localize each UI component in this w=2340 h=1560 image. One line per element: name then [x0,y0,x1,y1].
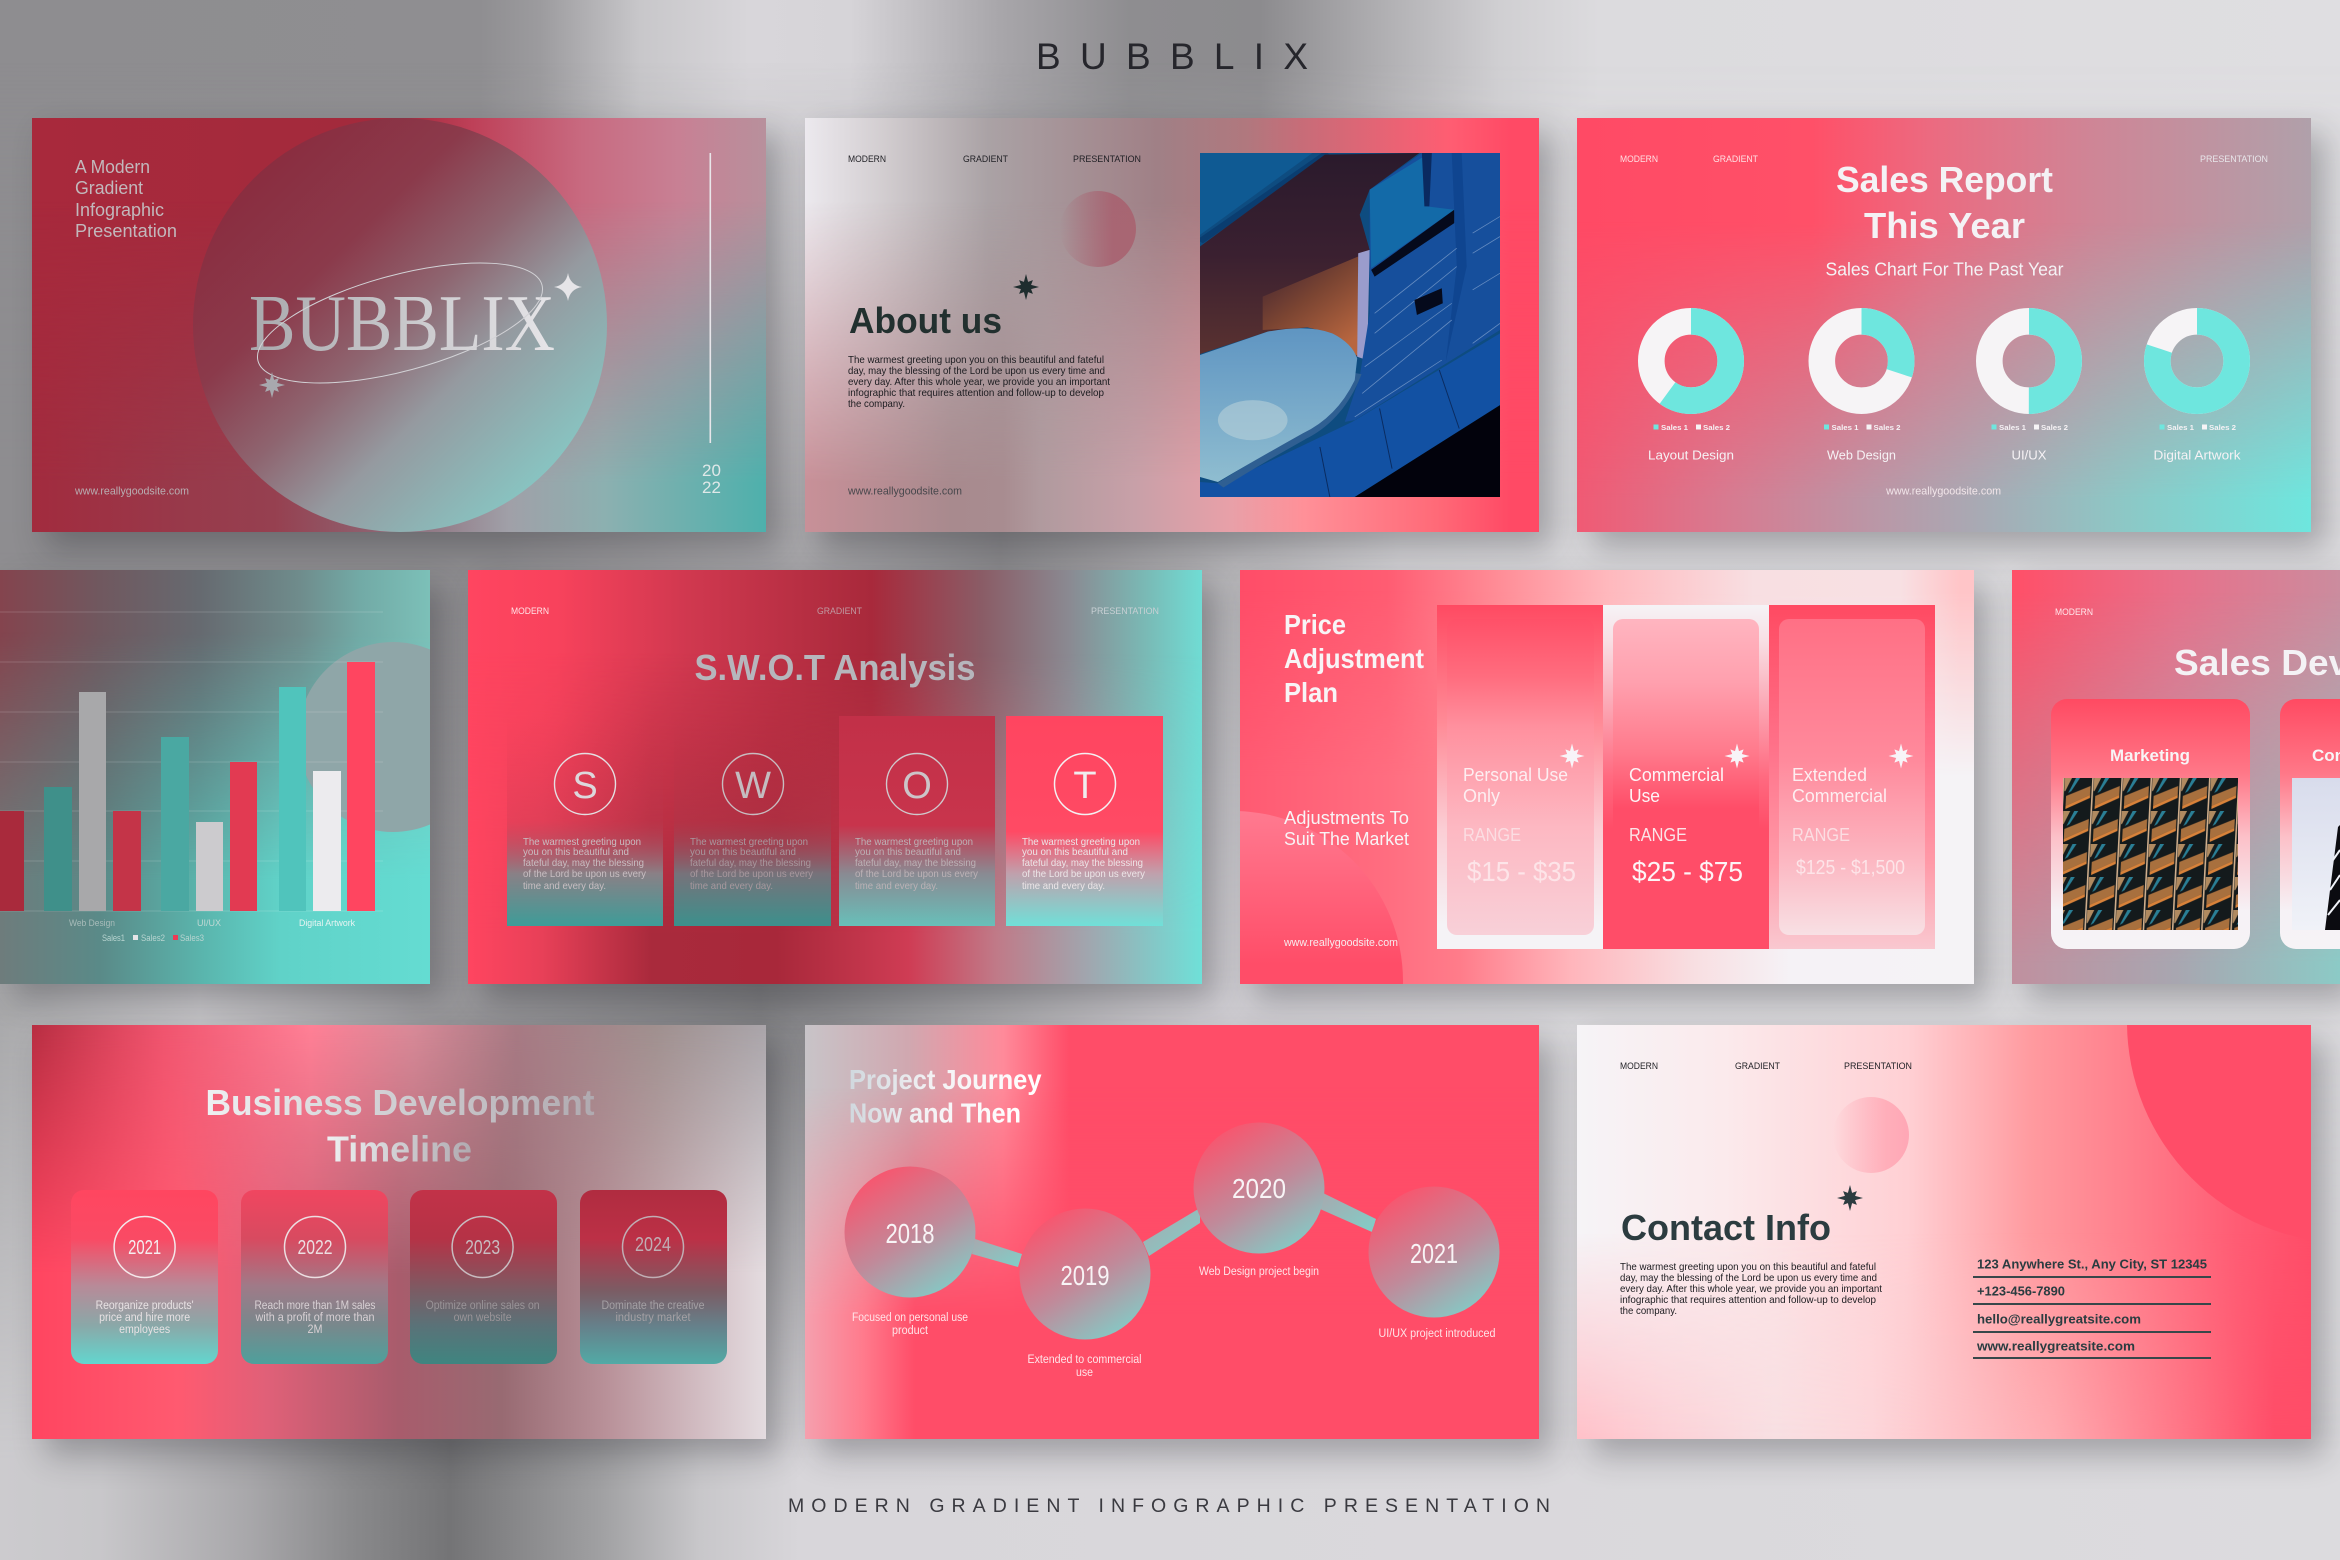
year: 22 [702,478,721,497]
panel: price adjustment plan [1240,570,1974,984]
cover subtitle: Infographic [75,200,164,220]
website: www.reallygoodsite.com [847,486,962,498]
donut labels: Web Design [1827,448,1896,462]
subheading: Adjustments To [1284,808,1409,828]
body text: infographic that requires attention and follow-up to develop [848,388,1104,399]
card: 2022: 2M [308,1322,322,1336]
header labels: PRESENTATION [1073,153,1141,164]
axis labels [69,918,356,928]
panel: bar chart slide [0,570,430,984]
card: 2024: industry market [616,1310,691,1324]
pricing column: personal: RANGE [1463,825,1521,845]
heading: This Year [1864,205,2025,246]
card: 2021: employees [119,1322,170,1336]
donut chart: layout design [1651,321,1731,401]
heading: Plan [1284,677,1338,708]
card: weaknesses: you on this beautiful and [690,847,796,858]
header labels: MODERN [1620,1060,1658,1071]
card: weaknesses: The warmest greeting upon [690,837,808,848]
card: threats [1006,716,1163,926]
swot artwork [507,605,1163,926]
node: 2020: Web Design project begin [1199,1264,1319,1278]
donut legends: Sales 2 [2041,423,2068,432]
heading: Adjustment [1284,643,1424,674]
header labels: MODERN [1620,153,1658,164]
body text [1620,1262,1882,1317]
timeline artwork [71,1082,727,1364]
card: 2021 [71,1190,218,1364]
icon: sparkle [554,273,582,301]
card: threats: time and every day. [1022,881,1105,892]
donut labels [1648,448,2241,462]
card: threats: of the Lord be upon us every [1022,869,1146,880]
decorative blob [1833,1097,1909,1173]
node: 2019: use [1076,1365,1093,1379]
axis labels: Digital Artwork [299,918,356,928]
heading: Now and Then [849,1098,1021,1128]
subheading: Sales Chart For The Past Year [1826,260,2064,280]
node: 2020 [1194,1122,1324,1278]
panel: cover slide [32,118,766,532]
header labels: GRADIENT [817,605,862,616]
donut legends: Sales 2 [2209,423,2236,432]
pricing column: extended: RANGE [1792,825,1850,845]
card: threats: The warmest greeting upon [1022,837,1140,848]
pricing column: commercial: Commercial [1629,765,1724,785]
card: strengths: fateful day, may the blessing [523,858,644,869]
subheading [1284,808,1409,849]
heading [849,1064,1042,1128]
card: opportunities: of the Lord be upon us every [855,869,979,880]
body text: the company. [1620,1306,1677,1317]
card: opportunities: you on this beautiful and [855,847,961,858]
card: weaknesses: time and every day. [690,881,773,892]
donut legends: Sales 2 [1703,423,1730,432]
body text: every day. After this whole year, we provide you an important [848,377,1110,388]
node: 2018: 2018 [886,1218,934,1249]
card: marketing: Marketing [2110,746,2190,765]
bars [0,662,375,911]
card: 2023: Optimize online sales on [426,1298,540,1312]
cover subtitle: Presentation [75,221,177,241]
card: content [2280,699,2340,949]
year [702,461,721,497]
node: 2021: UI/UX project introduced [1378,1326,1496,1340]
node: 2018: Focused on personal use [852,1310,968,1324]
donut labels: UI/UX [2012,448,2047,462]
chart legend: Sales2 [141,933,165,943]
pricing column: commercial: $25 - $75 [1632,856,1743,887]
footer caption: MODERN GRADIENT INFOGRAPHIC PRESENTATION [788,1495,1550,1517]
about artwork [847,153,1500,498]
icon: star [1013,274,1039,300]
subheading: Suit The Market [1284,829,1409,849]
panel: about us [805,118,1539,532]
sales development artwork [2051,606,2340,949]
pricing column: extended [1769,605,1935,949]
cover artwork [74,118,721,532]
body text: day, may the blessing of the Lord be upon us every time and [848,366,1105,377]
header labels: MODERN [511,605,549,616]
website: www.reallygoodsite.com [1885,486,2001,498]
donut legends: Sales 1 [2167,423,2194,432]
pricing column: commercial [1603,605,1769,949]
body text: The warmest greeting upon you on this beautiful and fateful [1620,1262,1876,1273]
header labels: GRADIENT [963,153,1008,164]
pricing column: extended: $125 - $1,500 [1796,857,1905,879]
card: weaknesses: of the Lord be upon us every [690,869,814,880]
cover subtitle: A Modern [75,157,150,177]
pricing column: personal [1437,605,1603,949]
card: 2022: with a profit of more than [255,1310,375,1324]
card: 2023: 2023 [465,1237,500,1259]
bar chart [0,612,430,943]
chart legend: Sales3 [180,933,204,943]
card: strengths: you on this beautiful and [523,847,629,858]
header labels: GRADIENT [1713,153,1758,164]
node: 2020: 2020 [1232,1173,1286,1204]
card: strengths: of the Lord be upon us every [523,869,647,880]
decorative circle [298,642,488,832]
donut legends: Sales 1 [1661,423,1688,432]
body text [848,355,1110,410]
main title: BUBBLIX [1036,36,1308,77]
pricing column: commercial: Use [1629,786,1660,806]
heading: Timeline [327,1128,472,1170]
donut chart: digital artwork [2157,321,2237,401]
card: opportunities: O [902,765,932,807]
decorative corner circle [1063,811,1403,1151]
donut labels: Digital Artwork [2154,448,2241,462]
header labels [511,605,1159,616]
donut legends: Sales 1 [1832,423,1858,432]
body text: the company. [848,399,905,410]
card: 2021: price and hire more [99,1310,190,1324]
card: 2022: Reach more than 1M sales [254,1298,376,1312]
panel: business timeline [32,1025,766,1439]
decorative corner circle [2127,801,2340,1243]
pricing column: extended: Extended [1792,765,1867,785]
node: 2019: Extended to commercial [1028,1352,1142,1366]
card: opportunities: time and every day. [855,881,938,892]
header labels: PRESENTATION [1091,605,1159,616]
icon: star [259,372,285,398]
cover subtitle [75,157,177,241]
chart legend: Sales1 [102,933,125,943]
body text: infographic that requires attention and follow-up to develop [1620,1295,1876,1306]
node: 2018: product [892,1323,928,1337]
panel: sales report [1577,118,2311,532]
body text: day, may the blessing of the Lord be upon us every time and [1620,1273,1877,1284]
donut legends: Sales 1 [1999,423,2026,432]
card: strengths: S [572,765,598,807]
node: 2021 [1368,1186,1500,1340]
pricing column: personal: $15 - $35 [1467,856,1576,887]
decorative blob [1060,191,1136,267]
axis labels: Web Design [69,918,115,928]
card: opportunities: The warmest greeting upon [855,837,973,848]
card: 2024: 2024 [635,1234,671,1256]
card: strengths: time and every day. [523,881,606,892]
card: threats: fateful day, may the blessing [1022,858,1143,869]
cover subtitle: Gradient [75,178,143,198]
pricing column: personal: Personal Use [1463,765,1568,785]
contact details: hello@reallygreatsite.com [1977,1312,2141,1326]
sales artwork [1620,153,2268,498]
contact artwork [1620,1025,2271,1359]
header label: MODERN [2055,606,2093,617]
heading [206,1082,595,1170]
node: 2021: 2021 [1410,1238,1458,1269]
orbit ellipse [246,239,554,407]
header labels [1620,1060,1912,1071]
contact details: +123-456-7890 [1977,1284,2065,1298]
body text: The warmest greeting upon you on this beautiful and fateful [848,355,1104,366]
header labels [1620,153,2268,164]
contact details: 123 Anywhere St., Any City, ST 12345 [1977,1256,2207,1272]
header labels: GRADIENT [1735,1060,1780,1071]
donut chart: ui/ux [1989,321,2069,401]
contact details: www.reallygreatsite.com [1976,1338,2135,1354]
year: 20 [702,461,721,480]
body text: every day. After this whole year, we provide you an important [1620,1284,1882,1295]
card: 2023 [410,1190,557,1364]
card: 2023: own website [454,1310,512,1324]
card: weaknesses: W [735,765,771,807]
panel: project journey [805,1025,1539,1439]
large gradient circle [193,118,607,532]
heading [1836,159,2053,246]
node: 2019: 2019 [1060,1260,1110,1291]
card: 2024: Dominate the creative [602,1298,705,1312]
journey artwork [844,1064,1500,1379]
donut legends [1654,423,2236,432]
header labels: MODERN [848,153,886,164]
card: opportunities: fateful day, may the blessing [855,858,976,869]
card: opportunities [839,716,995,926]
pricing column: personal: Only [1463,786,1500,806]
chart legend [102,933,204,943]
card: weaknesses [674,716,831,926]
card: 2022: 2022 [298,1237,332,1259]
card: 2021: 2021 [128,1237,161,1259]
vertical rule [710,153,711,443]
heading: Contact Info [1621,1207,1831,1248]
heading: About us [849,300,1002,341]
photo: blue building [1200,153,1500,497]
donut legends: Sales 2 [1874,423,1900,432]
card: weaknesses: fateful day, may the blessing [690,858,811,869]
pricing column: extended: Commercial [1792,786,1887,806]
card: threats: you on this beautiful and [1022,847,1128,858]
heading: Price [1284,609,1346,640]
axis labels: UI/UX [197,918,221,928]
donut chart: web design [1822,321,1901,401]
card: strengths: The warmest greeting upon [523,837,641,848]
card: 2021: Reorganize products' [96,1298,194,1312]
header labels: PRESENTATION [2200,153,2268,164]
card: 2024 [580,1190,727,1364]
website: www.reallygoodsite.com [1283,937,1398,949]
panel: contact info [1577,1025,2311,1439]
heading: S.W.O.T Analysis [694,647,976,688]
header labels: PRESENTATION [1844,1060,1912,1071]
donut labels: Layout Design [1648,448,1734,462]
pricing column: commercial: RANGE [1629,825,1687,845]
node: 2019 [1020,1208,1150,1379]
card: strengths [507,716,663,926]
contact details [1973,1256,2211,1359]
card: threats: T [1073,765,1097,807]
header labels [848,153,1141,164]
card: marketing [2051,699,2250,949]
card: 2022 [241,1190,388,1364]
logo wordmark: BUBBLIX [249,280,555,368]
heading [1284,609,1424,708]
node: 2018 [844,1166,976,1337]
heading: Business Development [206,1082,595,1123]
heading: Sales Report [1836,159,2053,200]
price artwork [1240,605,1935,984]
heading: Project Journey [849,1064,1042,1095]
website: www.reallygoodsite.com [74,486,189,498]
panel: swot analysis [468,570,1202,984]
icon: star [1837,1185,1863,1211]
panel: sales development [2012,570,2340,984]
connectors [972,1193,1376,1267]
